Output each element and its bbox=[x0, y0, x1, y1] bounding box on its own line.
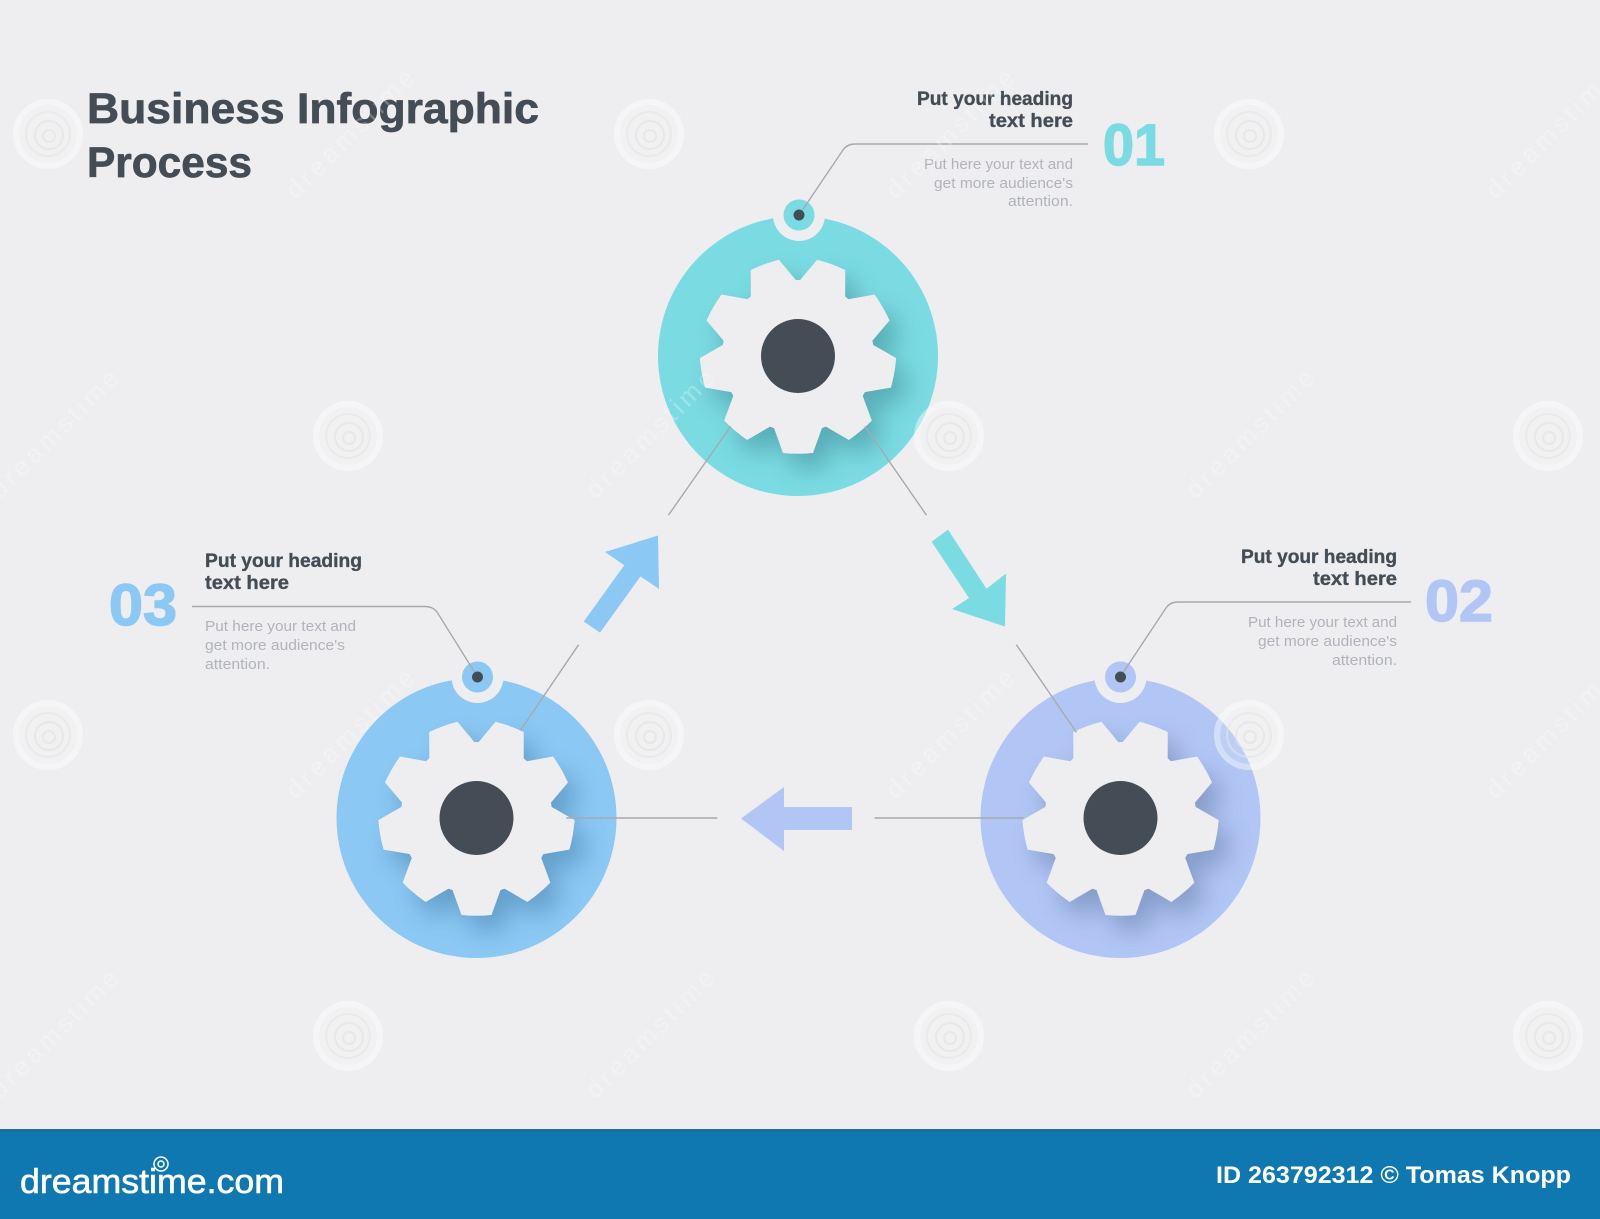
callout 03: text here bbox=[205, 572, 289, 594]
arrow: step 1 to step 2 bbox=[932, 530, 1006, 626]
callout 01: Put your heading bbox=[917, 88, 1073, 110]
title bbox=[87, 85, 539, 187]
callout 02: Put here your text and bbox=[1248, 614, 1397, 631]
watermark overlay: dreamstime bbox=[279, 663, 420, 804]
footer credit: ID 263792312 © Tomas Knopp bbox=[1216, 1162, 1571, 1189]
callout 03: Put your heading bbox=[205, 550, 362, 572]
watermark overlay: dreamstime bbox=[279, 63, 420, 204]
step 01: teal gear circle bbox=[658, 189, 938, 496]
callout 01: attention. bbox=[1008, 193, 1073, 210]
watermark overlay: dreamstime bbox=[579, 363, 720, 504]
watermark overlay: dreamstime bbox=[879, 63, 1020, 204]
callout 02 bbox=[1124, 546, 1493, 672]
watermark overlay: dreamstime bbox=[579, 963, 720, 1104]
callout 02: get more audience's bbox=[1258, 633, 1397, 650]
callout 02: text here bbox=[1313, 568, 1397, 590]
callout 03 bbox=[109, 550, 474, 673]
watermark overlay: dreamstime bbox=[1179, 963, 1320, 1104]
arrow: step 2 to step 3 bbox=[741, 787, 852, 851]
callout 02: 02 bbox=[1425, 569, 1493, 634]
callout 03: get more audience's bbox=[205, 637, 345, 654]
callout 01 bbox=[802, 88, 1165, 210]
arrow: step 3 to step 1 bbox=[584, 536, 659, 633]
callout 03: Put here your text and bbox=[205, 618, 356, 635]
title: Process bbox=[87, 139, 252, 187]
callout 01: text here bbox=[989, 110, 1073, 132]
watermark overlay: dreamstime bbox=[1179, 363, 1320, 504]
callout 01: get more audience's bbox=[934, 175, 1073, 192]
step 02: periwinkle gear circle bbox=[980, 651, 1260, 958]
footer bar bbox=[0, 1129, 1600, 1219]
callout 01: Put here your text and bbox=[924, 156, 1073, 173]
callout 02: attention. bbox=[1332, 652, 1397, 669]
callout 03: 03 bbox=[109, 573, 177, 638]
step 03: blue gear circle bbox=[336, 651, 616, 958]
callout 03: attention. bbox=[205, 656, 270, 673]
callout 01: 01 bbox=[1103, 113, 1165, 178]
title: Business Infographic bbox=[87, 85, 539, 133]
connector lines between gears bbox=[520, 426, 1076, 818]
callout 02: Put your heading bbox=[1241, 546, 1397, 568]
watermark overlay: dreamstime bbox=[879, 663, 1020, 804]
footer logo: dreamstime.com bbox=[20, 1163, 284, 1201]
